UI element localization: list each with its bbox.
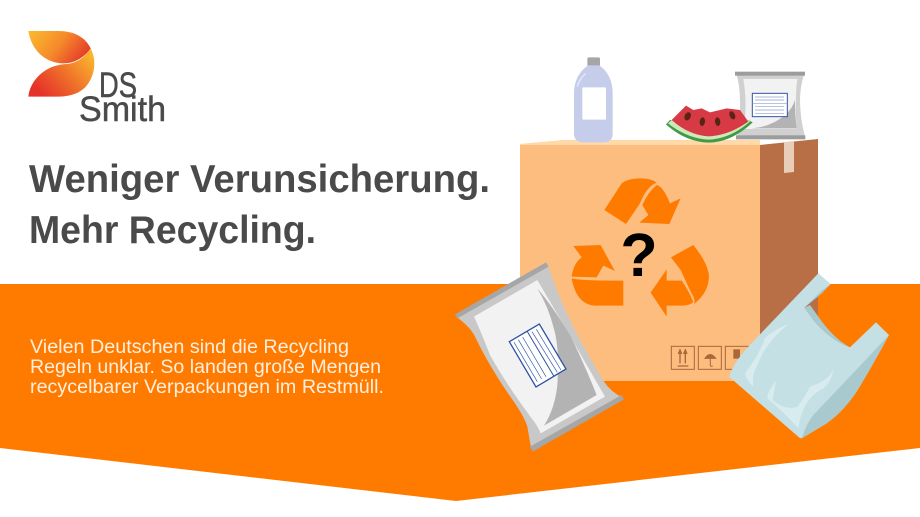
illustration: cardboard box — [520, 139, 818, 381]
title: Weniger Verunsicherung. — [29, 158, 490, 201]
tape — [784, 141, 794, 173]
logo wordmark: DS — [99, 66, 137, 105]
logo wordmark: Smith — [79, 90, 166, 129]
title: Mehr Recycling. — [29, 209, 316, 252]
logo: DS Smith — [28, 31, 166, 129]
intro text: recycelbarer Verpackungen im Restmüll. — [30, 377, 384, 398]
logo wordmark — [79, 66, 166, 129]
logo mark — [28, 31, 94, 97]
question mark: ? — [620, 221, 658, 289]
title — [29, 158, 490, 252]
icon: large foil pack — [455, 262, 624, 452]
label — [752, 93, 787, 117]
icon: plastic carrier bag — [729, 273, 889, 438]
intro text: Regeln unklar. So landen große Mengen — [30, 357, 381, 378]
icon: snack bag — [735, 72, 805, 139]
icon: watermelon slice — [666, 106, 753, 143]
icon: recycling symbol — [572, 178, 709, 317]
icon: plastic bottle — [574, 57, 613, 142]
intro text: Vielen Deutschen sind die Recycling — [30, 337, 349, 358]
label — [509, 324, 566, 387]
handling icons — [671, 346, 748, 369]
orange chevron band — [0, 284, 920, 501]
intro text — [30, 337, 384, 398]
